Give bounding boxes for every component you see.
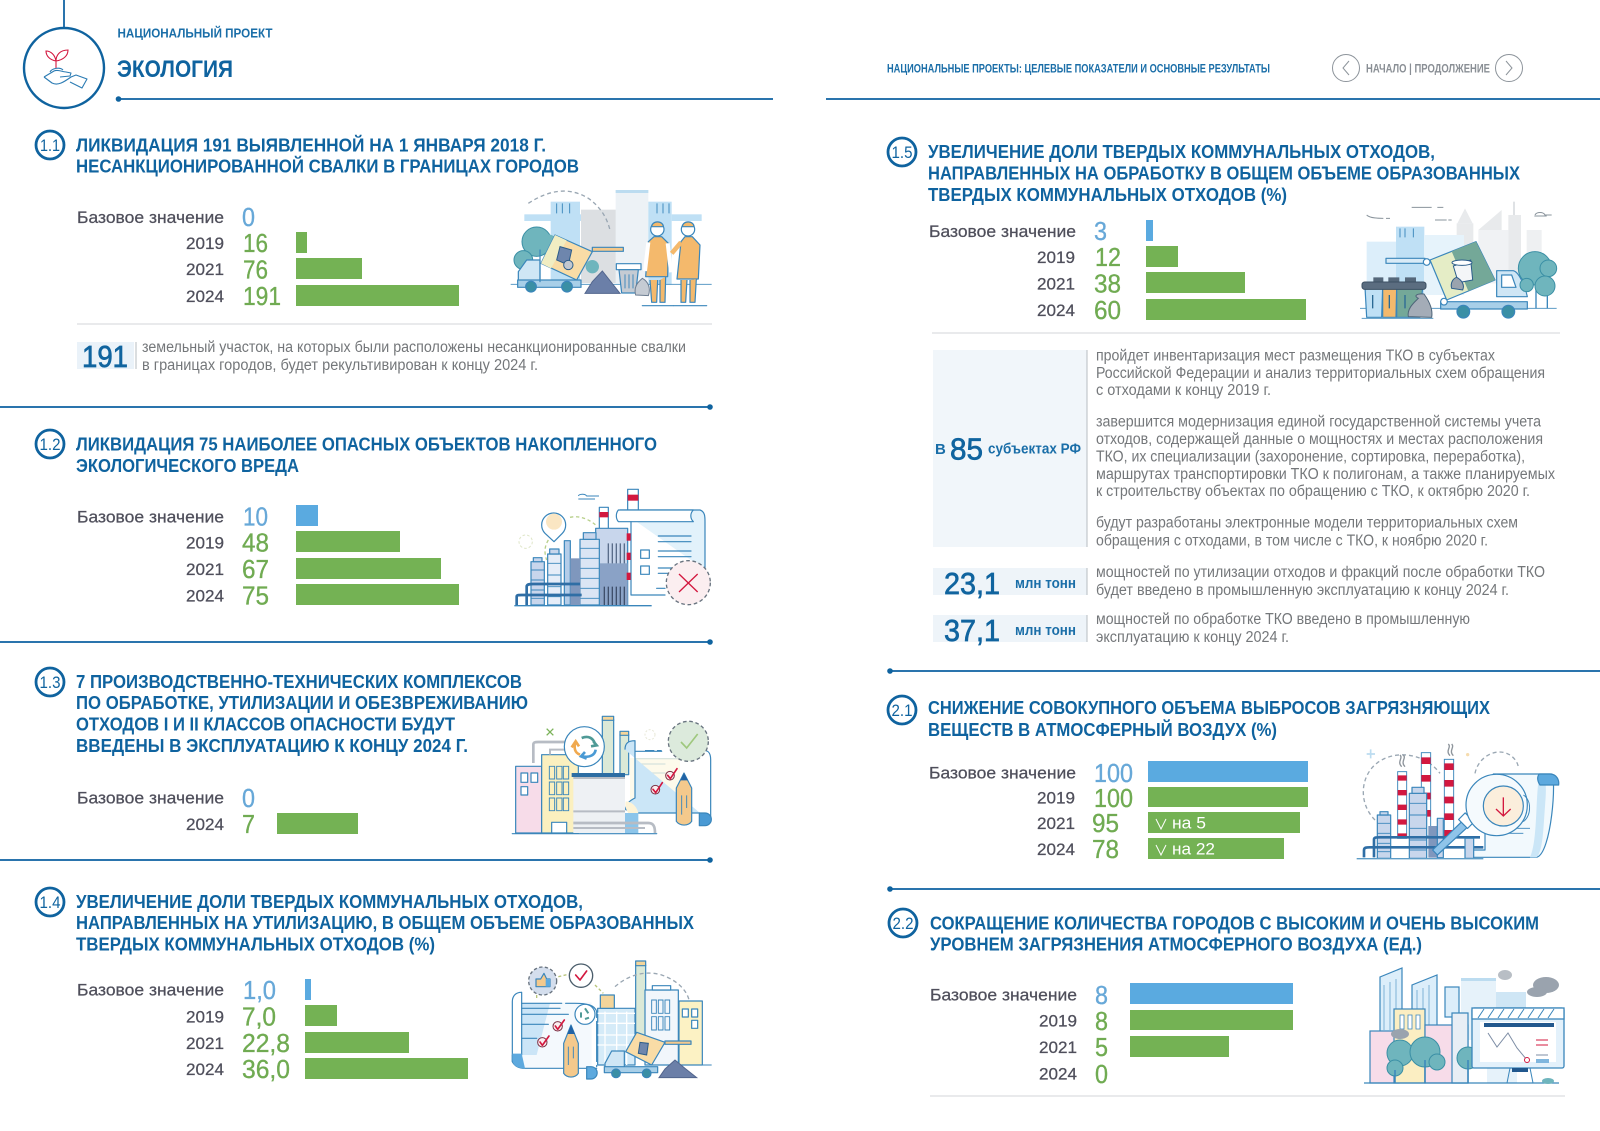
heading 2.2 — [930, 912, 1539, 954]
bar chart 1.3: 0 — [242, 783, 255, 813]
bar chart 2.1: на 22 — [1172, 840, 1215, 858]
bar chart 1.3: 2024 — [186, 815, 224, 834]
heading 1.4: ТВЕРДЫХ КОММУНАЛЬНЫХ ОТХОДОВ (%) — [76, 934, 435, 954]
bar chart 1.1: 16 — [243, 228, 268, 258]
callout: 37,1 million tons: 37,1 — [944, 613, 1000, 648]
bar chart 1.2: 67 — [242, 554, 269, 584]
bar chart 1.5 — [929, 216, 1306, 325]
panel: 2.2 — [889, 909, 1565, 1096]
illustration: chimneys and magnifier — [1357, 744, 1559, 859]
heading 2.1: ВЕЩЕСТВ В АТМОСФЕРНЫЙ ВОЗДУХ (%) — [928, 719, 1277, 740]
callout: 23,1 million tons: млн тонн — [1015, 576, 1076, 592]
badge 2.2: 2.2 — [892, 914, 914, 933]
bar chart 2.2 — [930, 980, 1293, 1089]
heading 1.2: ЭКОЛОГИЧЕСКОГО ВРЕДА — [76, 455, 299, 476]
callout: 85 subjects: обращения с отходами, в том числе с ТКО, к ноябрю 2020 г. — [1096, 532, 1488, 550]
heading 1.3: ПО ОБРАБОТКЕ, УТИЛИЗАЦИИ И ОБЕЗВРЕЖИВАНИЮ — [76, 692, 528, 713]
callout: 85 subjects: будут разработаны электронные модели территориальных схем — [1096, 514, 1518, 532]
badge 1.3: 1.3 — [40, 673, 60, 692]
callout: 85 subjects: пройдет инвентаризация мест размещения ТКО в субъектах — [1096, 348, 1495, 364]
illustration: truck, city and workers — [511, 190, 712, 306]
panel: 1.4 — [36, 888, 712, 1084]
panel: 1.3 — [36, 668, 711, 839]
callout: 85 subjects: маршрутах транспортировки ТКО к полигонам, а также планируемых — [1096, 466, 1555, 483]
badge 1.4: 1.4 — [40, 893, 60, 912]
callout: 37,1 million tons — [933, 611, 1470, 648]
bar chart 1.5: 2019 — [1037, 248, 1075, 267]
bar chart 1.5: 12 — [1095, 242, 1121, 272]
project title: ЭКОЛОГИЯ — [117, 56, 233, 83]
callout: 85 subjects: 85 — [950, 432, 983, 466]
heading 1.4: УВЕЛИЧЕНИЕ ДОЛИ ТВЕРДЫХ КОММУНАЛЬНЫХ ОТХОДОВ, — [76, 891, 583, 912]
bar chart 1.4: 2019 — [186, 1008, 224, 1026]
page header right — [826, 54, 1600, 99]
callout: 191: в границах городов, будет рекультивирован к концу 2024 г. — [142, 357, 538, 374]
bar chart 2.2: 2024 — [1039, 1064, 1077, 1084]
bar chart 2.1: на 5 — [1172, 814, 1206, 832]
heading 1.1: НЕСАНКЦИОНИРОВАННОЙ СВАЛКИ В ГРАНИЦАХ ГОРОДОВ — [76, 156, 579, 176]
bar chart 2.2: 5 — [1095, 1032, 1108, 1062]
badge 2.1 — [888, 696, 916, 724]
heading 1.4 — [76, 891, 695, 954]
bar chart 1.4: 2021 — [186, 1034, 224, 1053]
bar chart 1.2: 48 — [242, 528, 269, 558]
running title: НАЦИОНАЛЬНЫЕ ПРОЕКТЫ: ЦЕЛЕВЫЕ ПОКАЗАТЕЛИ И ОСНОВНЫЕ РЕЗУЛЬТАТЫ — [887, 64, 1270, 76]
bar chart 1.3: 7 — [242, 809, 255, 839]
badge 1.2: 1.2 — [40, 435, 60, 454]
illustration: document, factory and truck — [512, 961, 712, 1079]
callout: 191: 191 — [82, 339, 128, 374]
bar chart 2.2: 2021 — [1039, 1038, 1077, 1057]
bar chart 1.5: 2021 — [1037, 274, 1075, 294]
illustration: city and air monitor — [1364, 968, 1564, 1084]
bar chart 1.3: Базовое значение — [77, 788, 224, 808]
callout: 23,1 million tons: 23,1 — [944, 566, 1000, 601]
panel: 1.2 — [36, 430, 710, 610]
callout: 85 subjects: к строительству объектах по обращению с ТКО, к октябрю 2020 г. — [1096, 483, 1530, 500]
bar chart 1.4: 1,0 — [243, 975, 276, 1005]
bar chart 1.5: 38 — [1094, 268, 1121, 298]
callout: 85 subjects: В — [935, 441, 946, 458]
page header left — [24, 0, 773, 108]
heading 1.1 — [76, 134, 579, 176]
callout: 85 subjects: ТКО, их специализации (захоронение, сортировка, переработка), — [1096, 448, 1525, 466]
bar chart 1.2: 2024 — [186, 586, 224, 606]
callout: 37,1 million tons: мощностей по обработке ТКО введено в промышленную — [1096, 611, 1470, 628]
bar chart 2.2: 8 — [1095, 1006, 1108, 1036]
bar chart 2.1: 95 — [1092, 808, 1119, 838]
bar chart 2.2: 8 — [1095, 980, 1108, 1010]
callout: 85 subjects: субъектах РФ — [988, 440, 1081, 458]
callout: 37,1 million tons: эксплуатацию к концу 2024 г. — [1096, 629, 1289, 646]
bar chart 1.2: 2021 — [186, 560, 224, 579]
bar chart 1.1: 2021 — [186, 260, 224, 279]
heading 1.2: ЛИКВИДАЦИЯ 75 НАИБОЛЕЕ ОПАСНЫХ ОБЪЕКТОВ НАКОПЛЕННОГО — [76, 434, 657, 454]
bar chart 2.1: 100 — [1094, 783, 1133, 813]
heading 1.4: НАПРАВЛЕННЫХ НА УТИЛИЗАЦИЮ, В ОБЩЕМ ОБЪЕМЕ ОБРАЗОВАННЫХ — [76, 912, 695, 933]
bar chart 1.3 — [77, 783, 358, 839]
bar chart 1.2: 2019 — [186, 534, 224, 552]
illustration: bins and truck — [1360, 202, 1557, 318]
bar chart 1.1: 76 — [243, 254, 268, 284]
bar chart 2.1: Базовое значение — [929, 764, 1076, 782]
bar chart 1.1: 2024 — [186, 287, 224, 306]
bar chart 1.1: 191 — [243, 281, 281, 311]
bar chart 1.4: 22,8 — [242, 1028, 290, 1058]
navigation label: НАЧАЛО | ПРОДОЛЖЕНИЕ — [1366, 64, 1490, 76]
badge 1.2 — [36, 430, 64, 458]
callout: 191 — [77, 339, 686, 374]
bar chart 2.2: Базовое значение — [930, 986, 1077, 1004]
heading 1.5: НАПРАВЛЕННЫХ НА ОБРАБОТКУ В ОБЩЕМ ОБЪЕМЕ ОБРАЗОВАННЫХ — [928, 162, 1521, 184]
bar chart 2.1: 2024 — [1037, 840, 1075, 859]
callout: 85 subjects: завершится модернизация единой государственной системы учета — [1096, 414, 1541, 430]
header label: НАЦИОНАЛЬНЫЙ ПРОЕКТ — [118, 26, 273, 40]
callout: 23,1 million tons: будет введено в промышленную эксплуатацию к концу 2024 г. — [1096, 582, 1509, 599]
heading 1.5: ТВЕРДЫХ КОММУНАЛЬНЫХ ОТХОДОВ (%) — [928, 184, 1287, 205]
bar chart 1.4: 7,0 — [242, 1002, 276, 1032]
heading 1.5: УВЕЛИЧЕНИЕ ДОЛИ ТВЕРДЫХ КОММУНАЛЬНЫХ ОТХОДОВ, — [928, 141, 1435, 162]
illustration: refinery and cancelled document — [514, 489, 710, 606]
bar chart 1.1: 0 — [242, 202, 255, 232]
heading 2.2: УРОВНЕМ ЗАГРЯЗНЕНИЯ АТМОСФЕРНОГО ВОЗДУХА (ЕД.) — [930, 934, 1422, 954]
heading 1.3: ОТХОДОВ I И II КЛАССОВ ОПАСНОСТИ БУДУТ — [76, 714, 456, 734]
bar chart 2.1: 2021 — [1037, 814, 1075, 833]
bar chart 1.4: 36,0 — [242, 1054, 290, 1084]
bar chart 2.2: 2019 — [1039, 1012, 1077, 1030]
heading 2.1: СНИЖЕНИЕ СОВОКУПНОГО ОБЪЕМА ВЫБРОСОВ ЗАГРЯЗНЯЮЩИХ — [928, 697, 1491, 718]
bar chart 1.4: 2024 — [186, 1060, 224, 1079]
callout: 85 subjects: с отходами к концу 2019 г. — [1096, 382, 1271, 399]
bar chart 1.5: 3 — [1094, 216, 1107, 246]
bar chart 2.1: 100 — [1094, 758, 1133, 788]
heading 2.2: СОКРАЩЕНИЕ КОЛИЧЕСТВА ГОРОДОВ С ВЫСОКИМ И ОЧЕНЬ ВЫСОКИМ — [930, 912, 1539, 934]
callout: 191: земельный участок, на которых были расположены несанкционированные свалки — [142, 339, 686, 356]
badge 2.2 — [889, 909, 917, 937]
badge 1.3 — [36, 668, 64, 696]
icon: hand with seedling — [24, 28, 104, 108]
bar chart 1.4 — [77, 975, 468, 1084]
bar chart 1.5: 60 — [1094, 295, 1121, 325]
bar chart 1.1: Базовое значение — [77, 208, 224, 227]
panel: 1.5 — [888, 138, 1560, 648]
bar chart 1.2: 10 — [243, 502, 268, 532]
bar chart 2.2: 0 — [1095, 1059, 1108, 1089]
badge 1.1: 1.1 — [40, 136, 60, 155]
heading 1.3 — [76, 671, 528, 756]
heading 1.2 — [76, 434, 657, 476]
icon: next arrow — [1496, 54, 1522, 82]
panel: 2.1 — [888, 696, 1559, 864]
badge 1.4 — [36, 888, 64, 916]
heading 1.3: 7 ПРОИЗВОДСТВЕННО-ТЕХНИЧЕСКИХ КОМПЛЕКСОВ — [76, 671, 522, 692]
badge 1.1 — [36, 131, 64, 159]
bar chart 1.2 — [77, 502, 459, 610]
badge 2.1: 2.1 — [892, 701, 912, 720]
badge 1.5 — [888, 138, 916, 166]
callout: 85 subjects: Российской Федерации и анализ территориальных схем обращения — [1096, 365, 1545, 382]
callout: 37,1 million tons: млн тонн — [1015, 623, 1076, 639]
bar chart 1.4: Базовое значение — [77, 980, 224, 1000]
icon: previous arrow — [1332, 54, 1360, 82]
heading 1.1: ЛИКВИДАЦИЯ 191 ВЫЯВЛЕННОЙ НА 1 ЯНВАРЯ 2018 Г. — [76, 134, 546, 156]
bar chart 2.1 — [929, 758, 1308, 864]
bar chart 1.5: Базовое значение — [929, 222, 1076, 241]
badge 1.5: 1.5 — [892, 143, 912, 162]
bar chart 2.1: 78 — [1092, 834, 1119, 864]
callout: 85 subjects — [933, 348, 1555, 550]
bar chart 1.2: Базовое значение — [77, 508, 224, 526]
panel: 1.1 — [36, 131, 712, 374]
bar chart 1.2: 75 — [242, 580, 269, 610]
callout: 23,1 million tons: мощностей по утилизации отходов и фракций после обработки ТКО — [1096, 564, 1545, 581]
bar chart 1.1: 2019 — [186, 234, 224, 253]
callout: 85 subjects: отходов, содержащей данные о мощностях и местах расположения — [1096, 431, 1543, 448]
bar chart 2.1: 2019 — [1037, 788, 1075, 808]
heading 1.5 — [928, 141, 1521, 205]
bar chart 1.5: 2024 — [1037, 301, 1075, 320]
bar chart 1.1 — [77, 202, 459, 311]
heading 1.3: ВВЕДЕНЫ В ЭКСПЛУАТАЦИЮ К КОНЦУ 2024 Г. — [76, 735, 468, 756]
heading 2.1 — [928, 697, 1491, 740]
callout: 23,1 million tons — [933, 564, 1545, 601]
illustration: recycling plant and checklist — [512, 716, 711, 834]
